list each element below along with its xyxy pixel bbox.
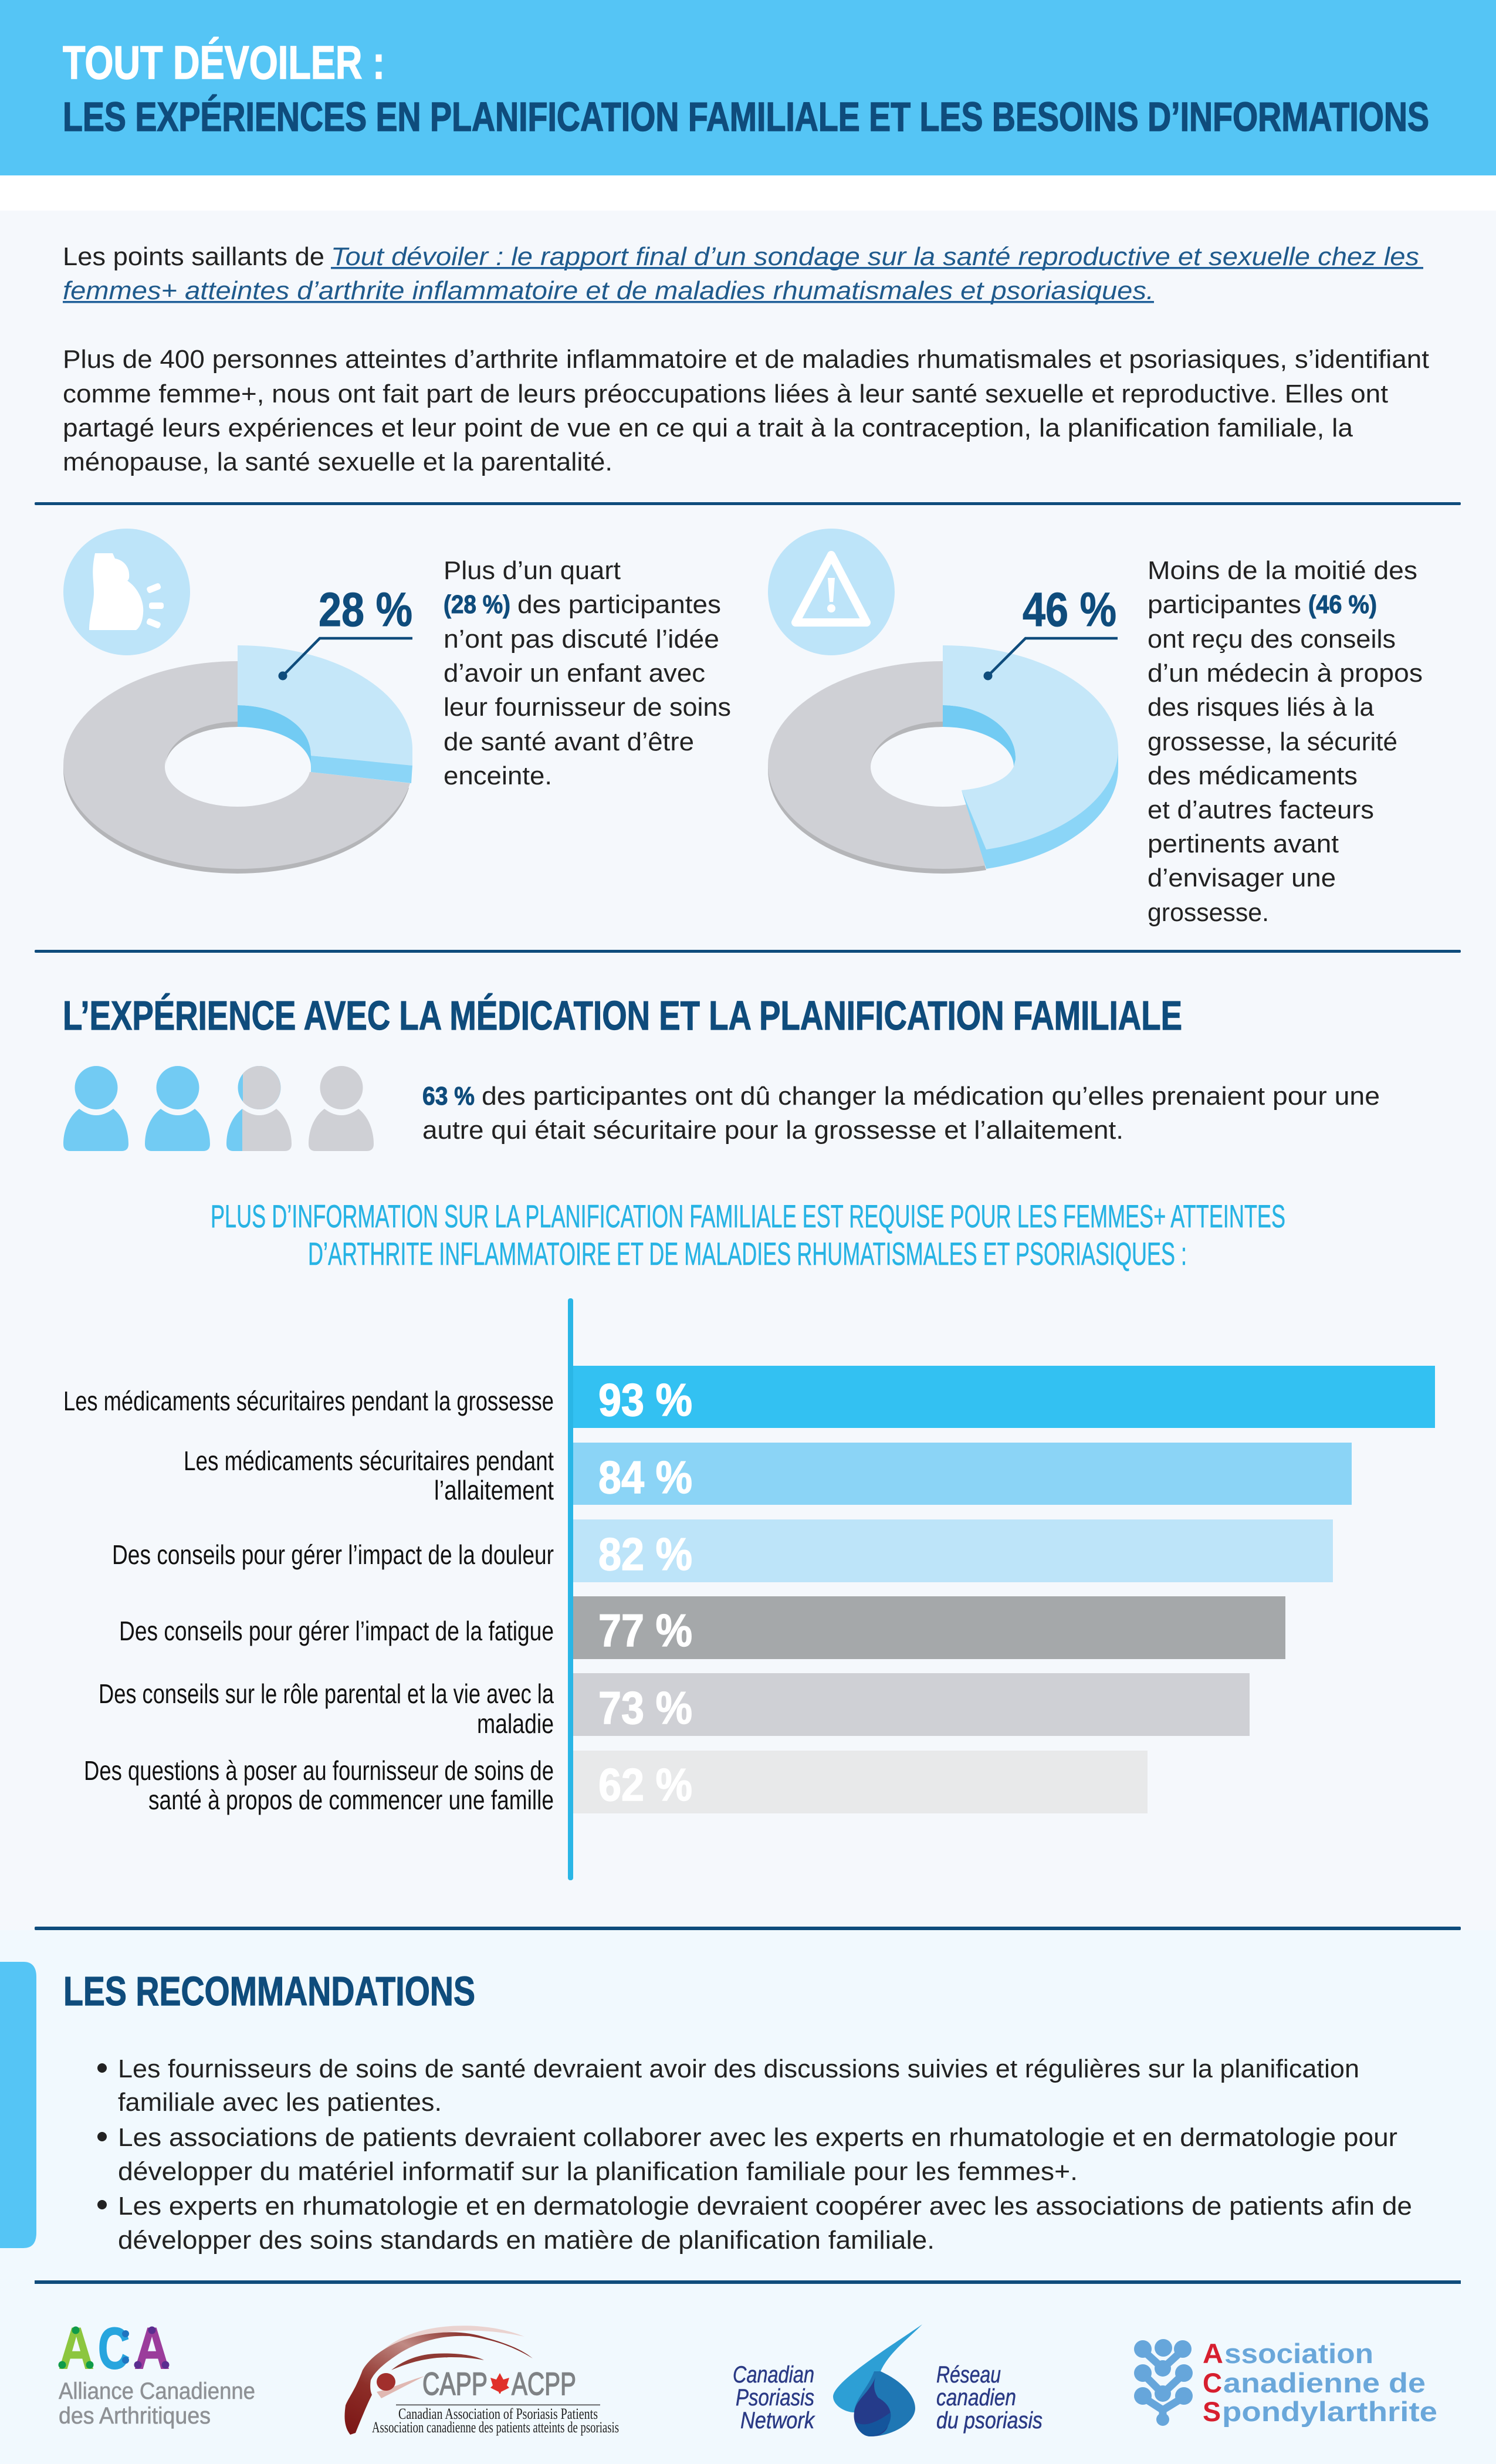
bar 73 %: 73 %	[598, 1682, 692, 1734]
logo: CAPP ACPP: Canadian Association of Psoriasis Patients	[398, 2405, 598, 2422]
text: 63 % statement: autre qui était sécuritaire pour la grossesse et l’allaitement.	[422, 1116, 1123, 1145]
callout 46 %	[983, 583, 1118, 681]
icon: warning triangle	[768, 529, 895, 655]
logo: Canadian Psoriasis Network	[733, 2324, 1043, 2436]
bar 77 %: 77 %	[598, 1605, 692, 1656]
logo: Association Canadienne de Spondylarthrite: S	[1203, 2396, 1221, 2427]
text: 46 % description: grossesse.	[1148, 898, 1269, 927]
logo: Canadian Psoriasis Network: du psoriasis	[936, 2408, 1043, 2433]
text: 46 % description: et d’autres facteurs	[1148, 796, 1374, 824]
text: 46 % description: d’envisager une	[1148, 864, 1336, 892]
donut chart 46 %	[768, 645, 1118, 874]
logo: Association Canadienne de Spondylarthrite: C	[1203, 2367, 1222, 2398]
bar 73 %	[99, 1673, 1250, 1739]
logo: Canadian Psoriasis Network: Canadian	[733, 2362, 814, 2388]
text: 46 % description: des risques liés à la	[1148, 693, 1375, 722]
bar 77 %: Des conseils pour gérer l’impact de la fatigue	[119, 1616, 554, 1646]
logo: CAPP ACPP: CAPP	[422, 2365, 488, 2402]
logo: CAPP ACPP: Association canadienne des patients atteints de psoriasis	[372, 2419, 619, 2436]
recommendation list: développer du matériel informatif sur la planification familiale pour les femmes+.	[118, 2157, 1078, 2186]
heading: medication experience: L’EXPÉRIENCE AVEC LA MÉDICATION ET LA PLANIFICATION FAMILIALE	[63, 993, 1182, 1038]
logo: CAPP ACPP: ACPP	[512, 2365, 576, 2402]
logo: Association Canadienne de Spondylarthrite: A	[1203, 2338, 1223, 2369]
heading: recommendations: LES RECOMMANDATIONS	[63, 1968, 475, 2014]
intro text block	[63, 242, 1429, 476]
bar 93 %	[63, 1366, 1435, 1428]
text: 28 % description: n’ont pas discuté l’idée	[444, 625, 719, 654]
recommendation list: développer des soins standards en matière de planification familiale.	[118, 2226, 935, 2255]
icon row: people 63 %	[63, 1066, 374, 1151]
bar 82 %: 82 %	[598, 1528, 692, 1580]
bar 73 %: maladie	[477, 1708, 554, 1739]
logo: ACA: des Arthritiques	[59, 2403, 211, 2429]
text: 28 % description	[444, 556, 731, 790]
intro text block: ménopause, la santé sexuelle et la parentalité.	[63, 448, 612, 476]
text: 46 % description: des médicaments	[1148, 761, 1358, 790]
text: 46 % description	[1148, 556, 1423, 927]
logo: CAPP ACPP	[344, 2326, 619, 2436]
callout 28 %	[278, 583, 412, 681]
logo: ACA: A	[134, 2316, 170, 2381]
bar 62 %: Des questions à poser au fournisseur de soins de	[84, 1755, 554, 1786]
text: 46 % description: grossesse, la sécurité	[1148, 727, 1397, 756]
recommendation list: familiale avec les patientes.	[118, 2088, 442, 2117]
bar 77 %	[119, 1596, 1285, 1659]
text: 28 % description: (28 %)	[444, 590, 510, 619]
text: 28 % description: leur fournisseur de soins	[444, 693, 731, 722]
text: 28 % description: d’avoir un enfant avec	[444, 659, 705, 688]
recommendation list: Les fournisseurs de soins de santé devraient avoir des discussions suivies et régulières sur la planification	[118, 2055, 1359, 2083]
logo: Association Canadienne de Spondylarthrite: pondylarthrite	[1222, 2396, 1437, 2427]
bar 84 %: l’allaitement	[434, 1475, 554, 1505]
text: 46 % description: (46 %)	[1308, 590, 1377, 619]
text: 28 % description: enceinte.	[444, 761, 552, 790]
panel: 46 % stat	[768, 529, 1423, 927]
logo: Association Canadienne de Spondylarthrite: ssociation	[1224, 2338, 1373, 2369]
icon: drop	[833, 2324, 922, 2436]
icon: maple leaf	[490, 2373, 509, 2394]
recommendation list: Les associations de patients devraient collaborer avec les experts en rhumatologie et en dermatologie pour	[118, 2123, 1397, 2152]
logo: Association Canadienne de Spondylarthrite: anadienne de	[1223, 2367, 1426, 2398]
intro text block: Tout dévoiler : le rapport final d’un sondage sur la santé reproductive et sexuelle chez les	[331, 242, 1419, 271]
bar 62 %	[84, 1751, 1148, 1815]
logo: ACA: C	[98, 2316, 130, 2381]
logo: ACA: A	[59, 2316, 94, 2381]
callout 28 %: 28 %	[319, 583, 412, 637]
callout 46 %: 46 %	[1023, 583, 1116, 637]
icon: pregnant woman	[63, 529, 190, 655]
intro text block: femmes+ atteintes d’arthrite inflammatoire et de maladies rhumatismales et psoriasiques.	[63, 276, 1154, 305]
intro text block: Les points saillants de	[63, 242, 324, 271]
text: 46 % description: ont reçu des conseils	[1148, 625, 1396, 654]
text: 28 % description: des participantes	[517, 590, 721, 619]
text: 46 % description: pertinents avant	[1148, 830, 1339, 858]
header banner	[0, 0, 1496, 175]
bar 84 %: Les médicaments sécuritaires pendant	[184, 1446, 554, 1476]
logo: ACA	[59, 2316, 255, 2429]
text: 63 % statement: 63 %	[422, 1082, 475, 1111]
text: 46 % description: participantes	[1148, 590, 1301, 619]
text: 28 % description: de santé avant d’être	[444, 727, 694, 756]
text: 63 % statement	[422, 1082, 1380, 1145]
intro text block: partagé leurs expériences et leur point de vue en ce qui a trait à la contraception, la planification familiale, la	[63, 414, 1353, 442]
intro text block: comme femme+, nous ont fait part de leurs préoccupations liées à leur santé sexuelle et reproductive. Elles ont	[63, 380, 1388, 408]
logo: ACA: Alliance Canadienne	[59, 2378, 255, 2404]
side tab	[0, 1962, 36, 2248]
bar 82 %	[112, 1519, 1333, 1582]
text: 63 % statement: des participantes ont dû changer la médication qu’elles prenaient pour une	[482, 1082, 1380, 1111]
logo: Canadian Psoriasis Network: Psoriasis	[736, 2385, 814, 2411]
subheading: information needs	[211, 1198, 1285, 1272]
bar 93 %: Les médicaments sécuritaires pendant la grossesse	[63, 1386, 554, 1416]
panel: 28 % stat	[63, 529, 731, 874]
icon: spine	[1134, 2339, 1193, 2426]
logo: Canadian Psoriasis Network: canadien	[936, 2385, 1016, 2411]
text: 28 % description: Plus d’un quart	[444, 556, 621, 585]
panel: recommendations	[0, 1962, 1412, 2255]
bar chart: information needs	[63, 1298, 1435, 1880]
logo: Association Canadienne de Spondylarthrite	[1134, 2338, 1437, 2427]
bar 93 %: 93 %	[598, 1374, 692, 1426]
bar 62 %: santé à propos de commencer une famille	[148, 1785, 554, 1815]
bar 84 %: 84 %	[598, 1451, 692, 1503]
title line 1: TOUT DÉVOILER :	[63, 36, 385, 89]
bar 82 %: Des conseils pour gérer l’impact de la douleur	[112, 1539, 554, 1570]
logo: Canadian Psoriasis Network: Network	[740, 2408, 815, 2433]
text: 46 % description: Moins de la moitié des	[1148, 556, 1417, 585]
logo: Canadian Psoriasis Network: Réseau	[936, 2362, 1001, 2388]
intro text block: Plus de 400 personnes atteintes d’arthrite inflammatoire et de maladies rhumatismales et psoriasiques, s’identifiant	[63, 345, 1429, 374]
recommendation list: Les experts en rhumatologie et en dermatologie devraient coopérer avec les associations de patients afin de	[118, 2192, 1412, 2221]
text: 46 % description: d’un médecin à propos	[1148, 659, 1423, 688]
bar 62 %: 62 %	[598, 1759, 692, 1810]
donut chart 28 %	[63, 645, 412, 874]
bar 84 %	[184, 1443, 1352, 1505]
bar 73 %: Des conseils sur le rôle parental et la vie avec la	[99, 1678, 554, 1709]
recommendation list	[97, 2055, 1412, 2255]
